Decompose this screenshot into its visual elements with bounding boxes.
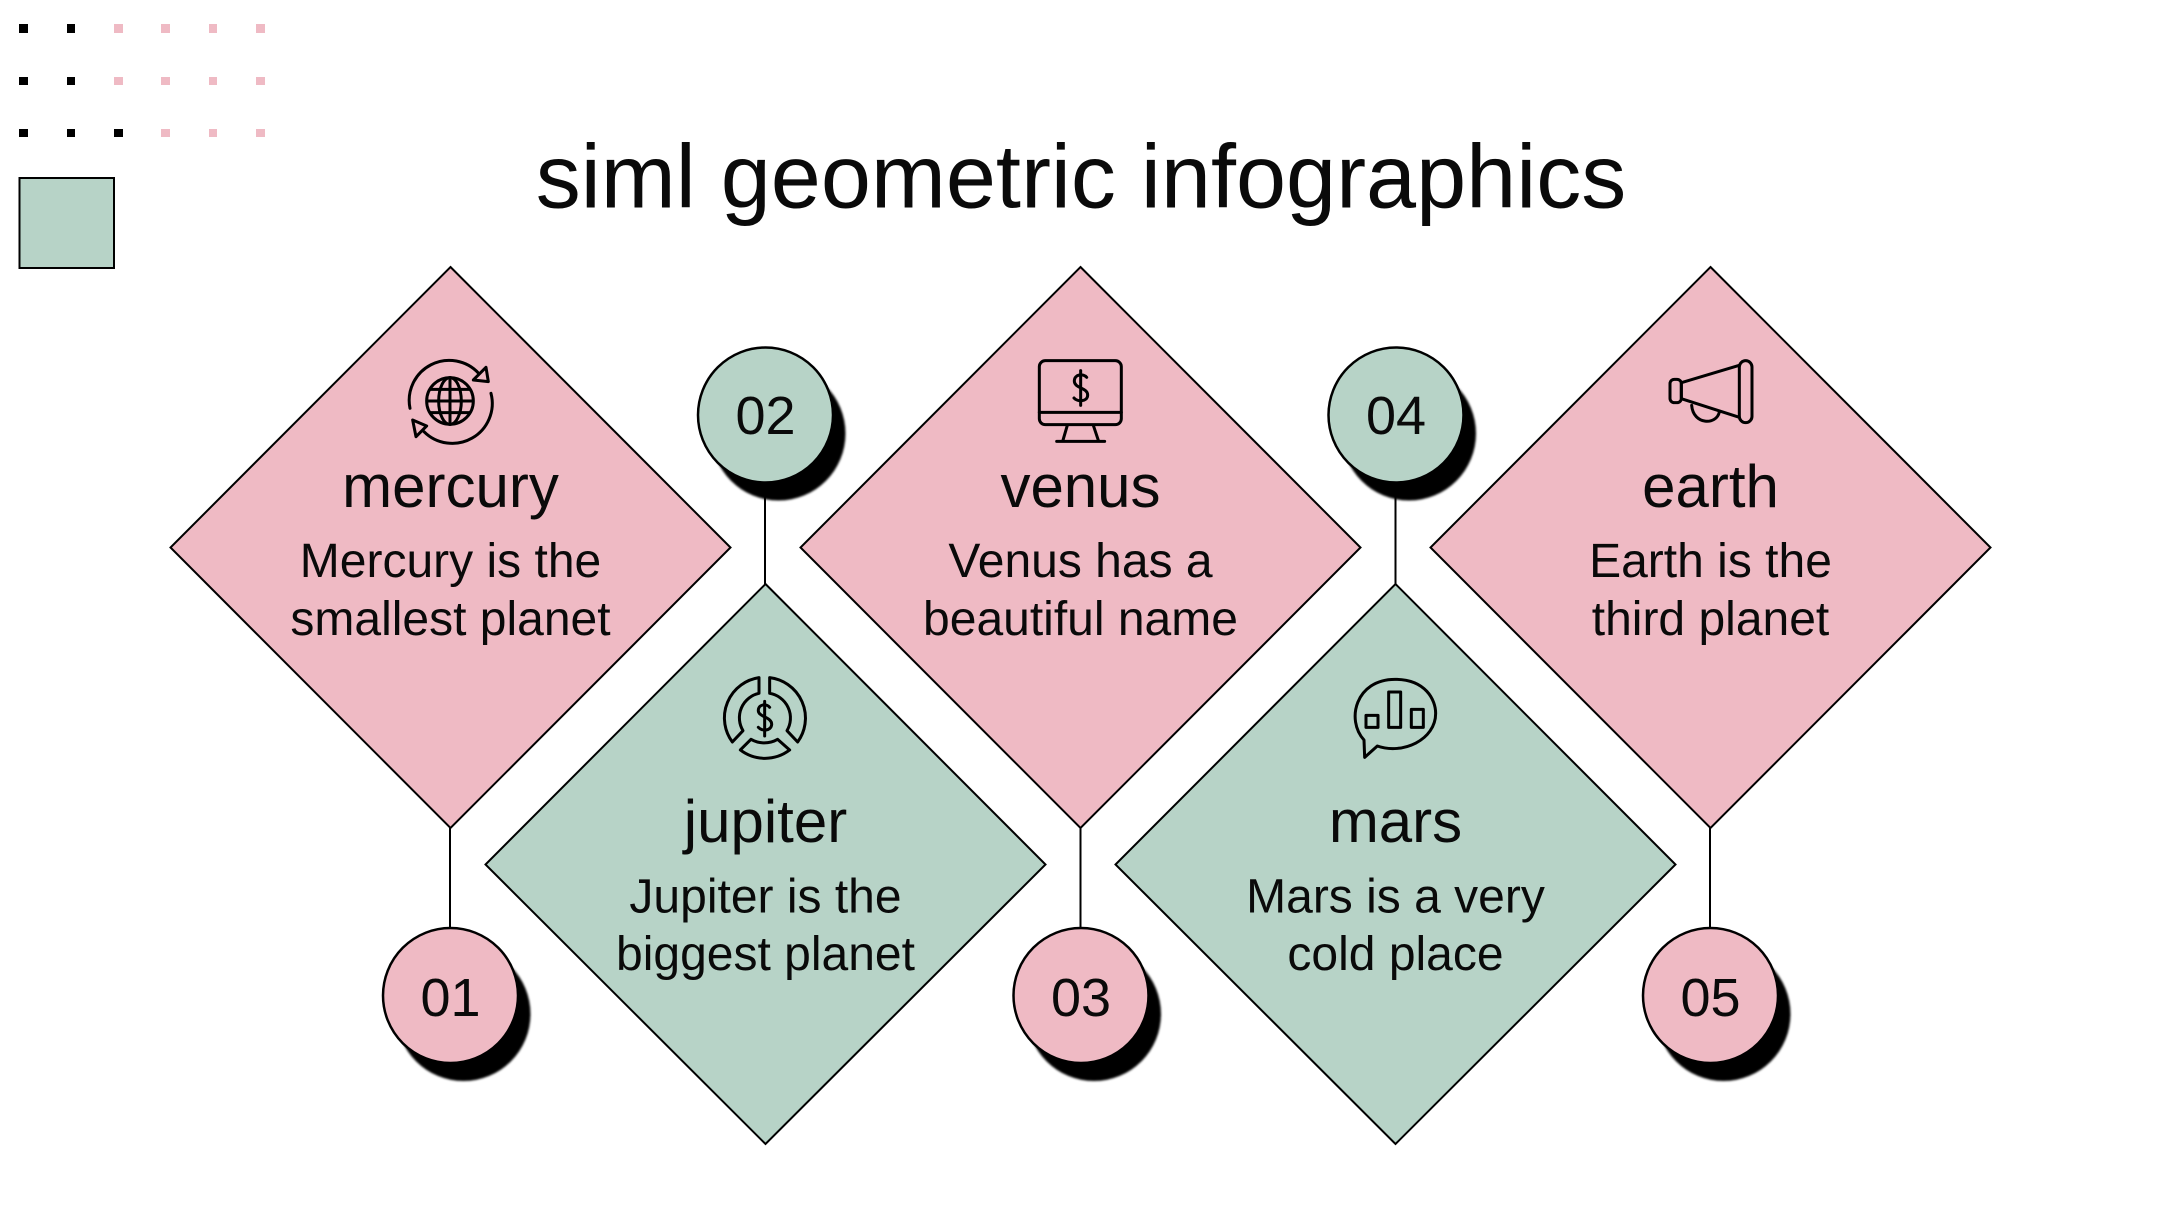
badge: 04 <box>1328 348 1476 500</box>
badge: 04: 04 <box>1366 386 1426 446</box>
description: jupiter: Jupiter is the <box>629 870 902 924</box>
icon: monitor with dollar <box>1039 361 1121 441</box>
connector: 04 to mars <box>1394 480 1396 585</box>
connector: 02 to jupiter <box>764 480 766 585</box>
badge: 05: 05 <box>1680 968 1741 1028</box>
icon: rotating globe <box>409 360 492 443</box>
icon: dollar ring chart <box>724 678 805 758</box>
heading: jupiter: jupiter <box>682 788 847 855</box>
heading: earth: earth <box>1642 453 1779 520</box>
icon: speech bubble chart <box>1355 679 1436 757</box>
badge: 01 <box>383 928 530 1081</box>
badge: 02: 02 <box>735 386 796 446</box>
panel: jupiter <box>486 584 1046 1144</box>
badge: 01: 01 <box>420 968 481 1028</box>
description: mars: cold place <box>1287 928 1504 981</box>
description: mercury: smallest planet <box>290 593 611 646</box>
description: mercury: Mercury is the <box>300 535 601 588</box>
badge: 03: 03 <box>1051 968 1111 1028</box>
icon: megaphone <box>1670 361 1752 423</box>
connector: mercury to 01 <box>449 828 451 930</box>
decorative green square <box>20 178 114 268</box>
badge: 03 <box>1014 928 1161 1081</box>
panel: earth <box>1430 267 1990 828</box>
heading: mars: mars <box>1329 788 1462 855</box>
badge: 05 <box>1643 928 1790 1081</box>
panel: mars <box>1116 584 1676 1144</box>
title: siml geometric infographics <box>536 128 1626 228</box>
description: earth: Earth is the <box>1589 535 1832 588</box>
heading: mercury: mercury <box>342 453 559 520</box>
description: jupiter: biggest planet <box>616 928 915 981</box>
panel: mercury <box>170 267 730 828</box>
dot grid decoration <box>19 24 265 137</box>
badge: 02 <box>698 348 846 500</box>
connector: venus to 03 <box>1080 828 1082 930</box>
description: mars: Mars is a very <box>1246 870 1545 924</box>
description: earth: third planet <box>1592 593 1829 646</box>
heading: venus: venus <box>1000 453 1161 520</box>
panel: venus <box>800 267 1360 828</box>
description: venus: beautiful name <box>923 593 1238 646</box>
connector: earth to 05 <box>1709 828 1711 930</box>
description: venus: Venus has a <box>948 535 1213 588</box>
